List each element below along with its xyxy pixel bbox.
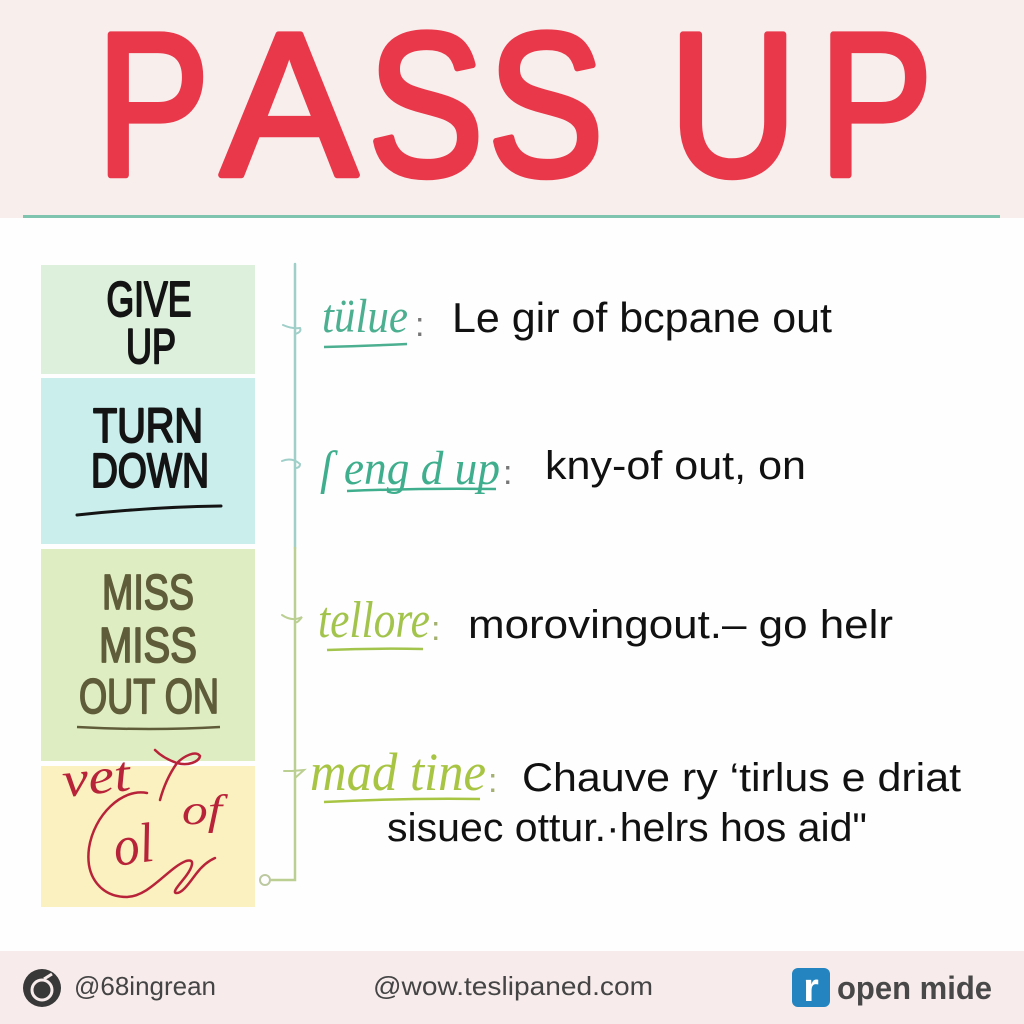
icon: brand logo xyxy=(792,966,830,1010)
term: mad tine xyxy=(310,742,486,802)
red handwritten words: ol xyxy=(109,812,157,879)
definition: kny-of out, on xyxy=(545,444,806,488)
row 4 xyxy=(310,742,961,850)
title xyxy=(96,0,933,219)
panel: give up xyxy=(41,265,255,374)
panel: miss out on: MISS xyxy=(99,619,197,673)
term: tellore xyxy=(318,592,430,649)
panel: give up: GIVE xyxy=(106,273,192,327)
panel: turn down xyxy=(41,378,255,544)
red handwritten words: vet xyxy=(59,745,134,808)
row 4: : xyxy=(488,762,497,800)
panel: miss out on: OUT ON xyxy=(79,670,219,724)
icon: brand logo: r xyxy=(803,966,819,1010)
row 2: : xyxy=(503,454,512,492)
panel: miss out on xyxy=(41,549,255,761)
icon: round logo xyxy=(23,969,61,1007)
header band xyxy=(0,0,1024,219)
red handwritten words xyxy=(59,745,229,879)
row 1: : xyxy=(415,306,424,344)
definition: Chauve ry ‘tirlus e driat xyxy=(522,756,961,800)
footer band xyxy=(0,951,1024,1024)
row 3: : xyxy=(431,610,440,648)
row 3 xyxy=(318,592,893,650)
panel: turn down: TURN xyxy=(93,400,203,453)
term: tülue xyxy=(322,290,408,343)
website: @wow.teslipaned.com xyxy=(373,971,653,1001)
row 1 xyxy=(322,290,832,347)
definition: Le gir of bcpane out xyxy=(452,294,832,341)
panel: yellow note xyxy=(41,745,255,907)
definition: morovingout.– go helr xyxy=(468,603,893,647)
panel: miss out on: MISS xyxy=(102,566,194,620)
brand name: open mide xyxy=(837,970,992,1006)
term: ſ eng d up xyxy=(320,442,500,495)
social handle: @68ingrean xyxy=(74,971,216,1001)
red swash curves xyxy=(88,750,215,897)
red handwritten words: of xyxy=(182,788,229,834)
header divider xyxy=(23,215,1000,218)
row 4: sisuec ottur.·helrs hos aid" xyxy=(387,806,867,850)
row 2 xyxy=(320,442,806,495)
connector bracket xyxy=(260,264,304,885)
panel: turn down: DOWN xyxy=(91,445,209,498)
panel: give up: UP xyxy=(126,320,176,374)
